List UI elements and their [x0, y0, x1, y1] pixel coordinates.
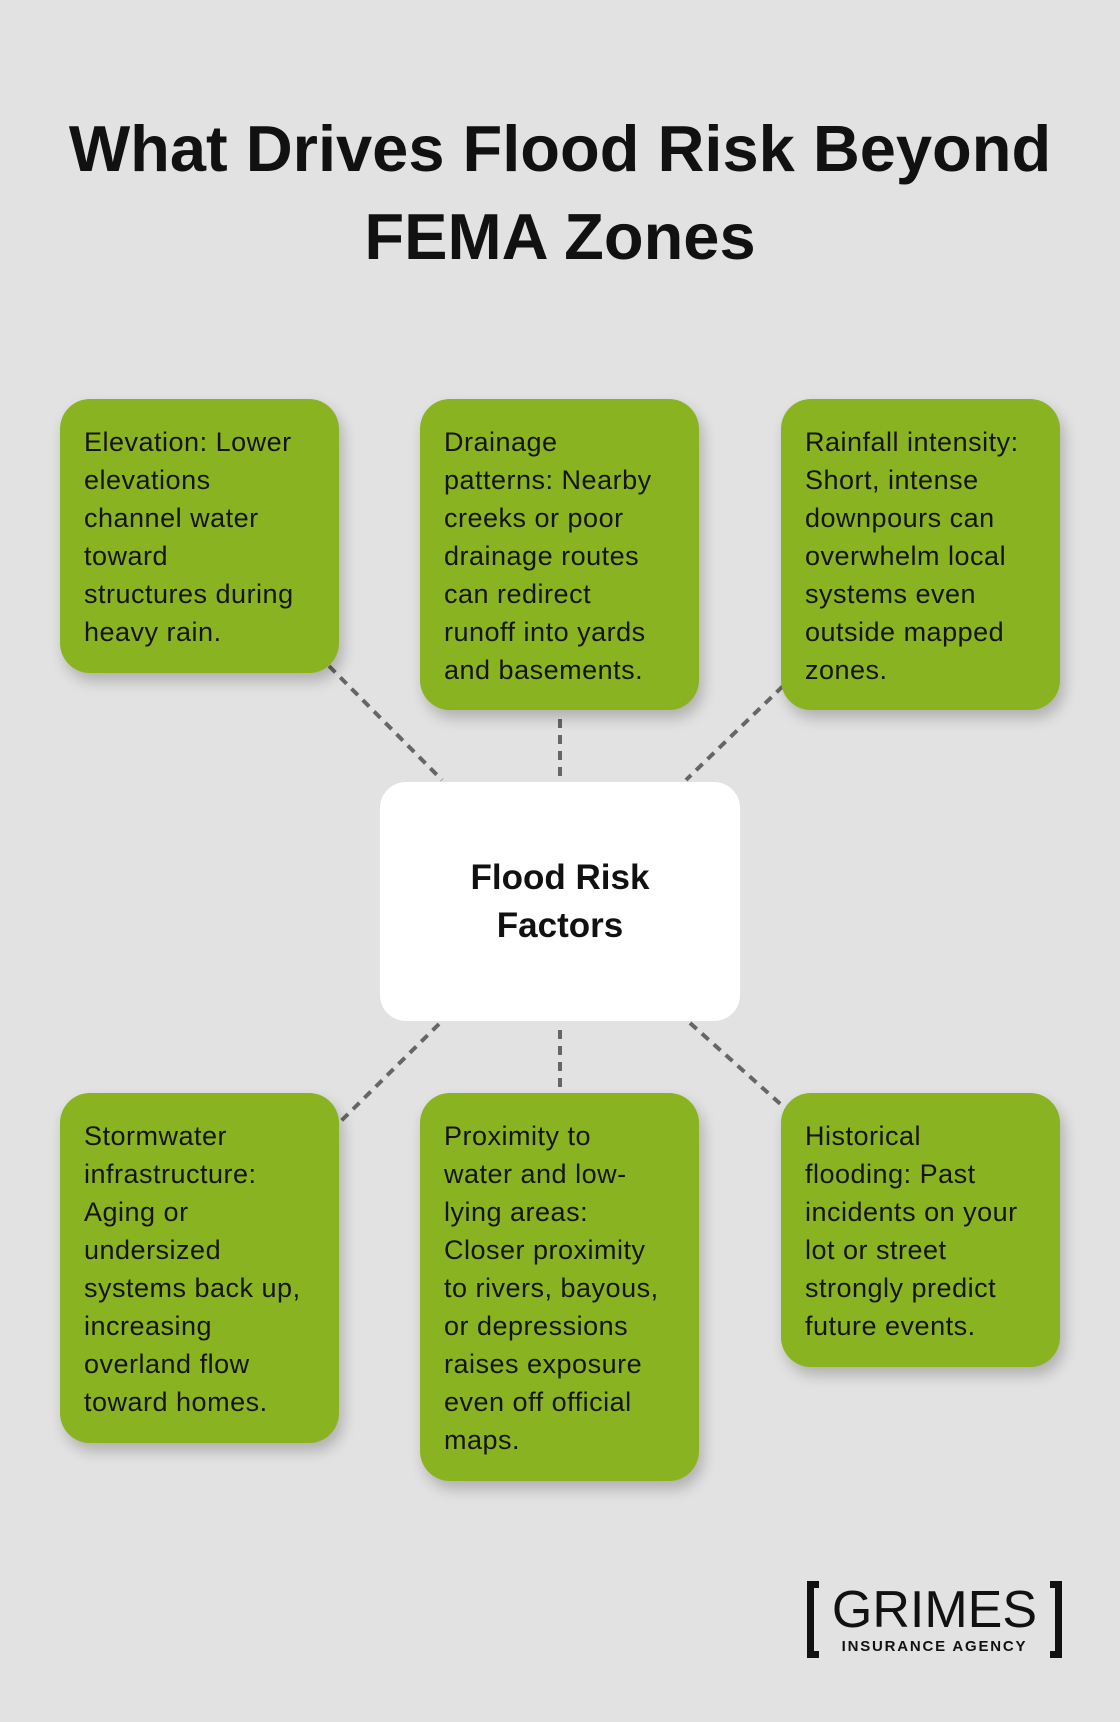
box: proximity	[420, 1093, 699, 1481]
box: drainage: and basements.	[444, 655, 643, 685]
box: elevation: structures during	[84, 579, 294, 609]
box: historical: strongly predict	[805, 1273, 996, 1303]
box: rainfall: systems even	[805, 579, 976, 609]
logo	[807, 1581, 1062, 1658]
center: flood risk factors	[380, 782, 740, 1021]
box: elevation: elevations	[84, 465, 211, 495]
box: proximity: raises exposure	[444, 1349, 642, 1379]
box: elevation: heavy rain.	[84, 617, 222, 647]
box: historical: flooding: Past	[805, 1159, 976, 1189]
box: stormwater: increasing	[84, 1311, 212, 1341]
box: proximity: lying areas:	[444, 1197, 588, 1227]
center: flood risk factors: Factors	[497, 906, 623, 944]
title	[69, 112, 1051, 273]
box: drainage: Drainage	[444, 427, 558, 457]
box: rainfall	[781, 399, 1060, 710]
box: stormwater: undersized	[84, 1235, 221, 1265]
box: historical: future events.	[805, 1311, 976, 1341]
box: drainage: creeks or poor	[444, 503, 624, 533]
box: rainfall: Rainfall intensity:	[805, 427, 1019, 457]
box: historical: incidents on your	[805, 1197, 1018, 1227]
title: FEMA Zones	[364, 200, 756, 273]
center: flood risk factors: Flood Risk	[471, 858, 649, 896]
box: stormwater: Aging or	[84, 1197, 189, 1227]
box: proximity: even off official	[444, 1387, 632, 1417]
box: historical: Historical	[805, 1121, 921, 1151]
box: stormwater: systems back up,	[84, 1273, 301, 1303]
box: stormwater: toward homes.	[84, 1387, 268, 1417]
box: drainage: can redirect	[444, 579, 591, 609]
logo: GRIMES	[832, 1581, 1037, 1639]
box: elevation: toward	[84, 541, 168, 571]
box: stormwater: infrastructure:	[84, 1159, 257, 1189]
box: drainage: runoff into yards	[444, 617, 646, 647]
box: proximity: Proximity to	[444, 1121, 591, 1151]
box: proximity: or depressions	[444, 1311, 628, 1341]
box: rainfall: outside mapped	[805, 617, 1004, 647]
box: rainfall: downpours can	[805, 503, 995, 533]
box: elevation: Elevation: Lower	[84, 427, 292, 457]
box: stormwater	[60, 1093, 339, 1443]
box: stormwater: Stormwater	[84, 1121, 227, 1151]
box: drainage: drainage routes	[444, 541, 639, 571]
box: elevation	[60, 399, 339, 673]
box: proximity: water and low-	[444, 1159, 627, 1189]
box: drainage: patterns: Nearby	[444, 465, 652, 495]
box: stormwater: overland flow	[84, 1349, 250, 1379]
logo: INSURANCE AGENCY	[842, 1638, 1027, 1655]
box: proximity: maps.	[444, 1425, 520, 1455]
box: proximity: to rivers, bayous,	[444, 1273, 659, 1303]
box: elevation: channel water	[84, 503, 259, 533]
box: rainfall: Short, intense	[805, 465, 979, 495]
box: drainage	[420, 399, 699, 710]
box: rainfall: overwhelm local	[805, 541, 1006, 571]
box: historical: lot or street	[805, 1235, 947, 1265]
box: proximity: Closer proximity	[444, 1235, 646, 1265]
box: historical	[781, 1093, 1060, 1367]
box: rainfall: zones.	[805, 655, 888, 685]
title: What Drives Flood Risk Beyond	[69, 112, 1051, 185]
